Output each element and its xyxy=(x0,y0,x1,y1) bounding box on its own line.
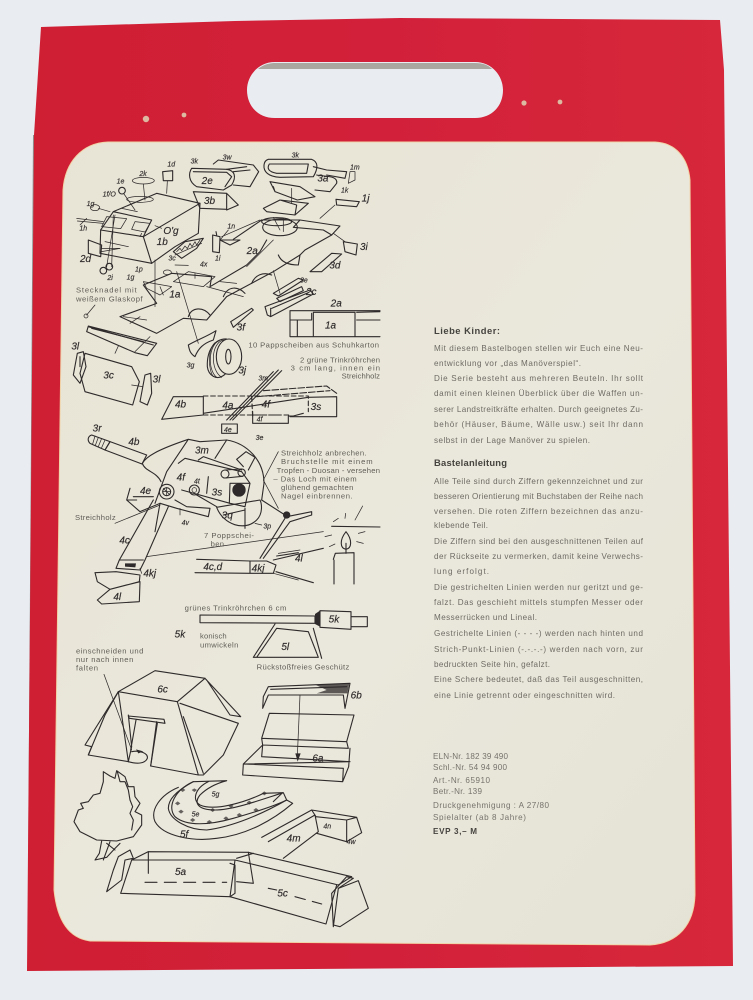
print and article details: Spielalter (ab 8 Jahre) xyxy=(433,813,526,822)
left trail 4c 4kj 4l xyxy=(95,500,168,604)
recoilless gun 5k 5l: umwickeln xyxy=(200,641,238,650)
chassis 2a with wheel arches: 4x xyxy=(200,262,208,269)
recoilless gun 5k 5l: 5k xyxy=(175,629,186,640)
text block: Liebe Kinder xyxy=(434,325,644,445)
print and article details: Betr.-Nr. 139 xyxy=(433,787,482,796)
chassis 2a with wheel arches xyxy=(120,220,340,333)
print and article details: Druckgenehmigung : A 27/80 xyxy=(433,801,549,810)
bumper and front 3c 3l xyxy=(71,317,161,405)
toothed insert and part 1i: 1n xyxy=(227,223,235,230)
small parts left: 1g xyxy=(87,201,95,208)
bunker 6a 6b: 6b xyxy=(351,690,362,701)
gun barrel and muzzle 4b 3r xyxy=(88,424,147,464)
fold plan 2a 1a: 1a xyxy=(325,320,337,331)
upper right parts: 3k xyxy=(292,152,300,159)
wheel sectors 3q 4v: Streichholz xyxy=(75,513,116,522)
chassis 2a with wheel arches: 3c xyxy=(168,256,176,263)
fenders and tracks 3k 3w 2e 3b: 3k xyxy=(191,158,199,165)
toothed insert and part 1i xyxy=(173,220,260,263)
wheel 3j and 3g xyxy=(177,272,247,377)
upper right parts: 1m xyxy=(350,164,360,171)
instruction paragraphs: Gestrichelte Linien (- - - -) werden nach hinten und xyxy=(434,629,643,638)
small parts left: 2k xyxy=(138,171,147,178)
drinking-straw note: Streichholz xyxy=(342,372,380,381)
wheel sectors 3q 4v: 4e xyxy=(140,486,152,497)
left trail 4c 4kj 4l: 4l xyxy=(113,592,122,603)
intro paragraph: Die Serie besteht aus mehreren Beuteln. Ihr sollt xyxy=(434,374,644,383)
earth walls 5f 5e 5g: 5e xyxy=(192,812,200,819)
instruction paragraphs: besseren Orientierung mit Buchstaben der Reihe nach xyxy=(434,492,643,501)
fenders and tracks 3k 3w 2e 3b: 3w xyxy=(223,154,233,161)
wheel 3j and 3g: 3j xyxy=(238,365,247,376)
pin label: weißem Glaskopf xyxy=(75,294,144,303)
bumper and front 3c 3l: 3l xyxy=(153,375,161,386)
print and article details: Schl.-Nr. 54 94 900 xyxy=(433,763,507,772)
right trail detail with candle and nail xyxy=(147,500,380,584)
heading: Bastelanleitung: Bastelanleitung xyxy=(434,457,507,468)
strip lower end 4e 4f: 4f xyxy=(257,416,264,423)
intro paragraph: serer Landstreitkräfte erhalten. Durch geeignetes Zu- xyxy=(434,405,643,414)
intro paragraph: selbst in der Lage Manöver zu spielen. xyxy=(434,436,590,445)
disc note: ben xyxy=(211,540,224,549)
intro paragraph: behör (Häuser, Bäume, Wälle usw.) seit Ihr dann xyxy=(434,420,643,429)
small parts left: 1d xyxy=(167,162,176,169)
match instructions: Streichholz anbrechen. xyxy=(281,449,367,458)
tent bunker 6c: nur nach innen xyxy=(76,655,133,664)
upper right parts: 1j xyxy=(362,194,370,205)
match instructions: Tropfen - Duosan - versehen xyxy=(277,466,380,475)
instruction paragraphs: Messerrücken und Lineal. xyxy=(434,613,537,622)
wheel sectors 3q 4v xyxy=(75,484,271,530)
pin label xyxy=(75,286,144,318)
match instructions: Nagel einbrennen. xyxy=(281,492,353,501)
gun barrel and muzzle 4b 3r: 3r xyxy=(93,424,102,435)
trench 4m 4n 4w: 4w xyxy=(347,839,357,846)
instruction paragraphs: der Rückseite zu vermerken, damit keine Verwechs- xyxy=(434,552,643,561)
instruction paragraphs: bedruckten Seite hin, gefalzt. xyxy=(434,660,550,669)
strips 3d 3e 2c 3f: 3d xyxy=(329,260,341,271)
print and article details: EVP 3,– M xyxy=(433,827,477,836)
match instructions: glühend gemachten xyxy=(281,483,353,492)
left trail 4c 4kj 4l: 4kj xyxy=(143,569,157,580)
instruction paragraphs: klebende Teil. xyxy=(434,521,488,530)
strips 3d 3e 2c 3f: 3f xyxy=(237,323,246,334)
strips 3d 3e 2c 3f: 2c xyxy=(305,287,317,298)
small parts left: 1e xyxy=(117,178,125,185)
right trail detail with candle and nail: 4kj xyxy=(252,564,265,575)
strip lower end 4e 4f xyxy=(222,412,303,434)
disc note xyxy=(204,531,254,549)
grey card edge behind cover xyxy=(28,135,36,880)
earth walls 5f 5e 5g: 5g xyxy=(212,792,220,799)
print and article details: Art.-Nr. 65910 xyxy=(433,776,490,785)
bumper and front 3c 3l: 3l xyxy=(71,341,80,352)
small parts left xyxy=(77,162,176,282)
small parts left: 1h xyxy=(79,226,87,233)
instruction paragraphs: Die gestrichelten Linien werden nur geritzt und ge- xyxy=(434,583,643,592)
gun shield 3m and mount: 3m xyxy=(195,445,209,456)
match instructions: – Das Loch mit einem xyxy=(273,474,357,483)
fenders and tracks 3k 3w 2e 3b xyxy=(190,154,259,210)
intro paragraph: damit einen kleinen Überblick über die Waffen un- xyxy=(434,389,643,398)
drawing: exploded vehicle assembly xyxy=(71,152,380,420)
instruction paragraphs: Strich-Punkt-Linien (-.-.-.-) werden nach vorn, zur xyxy=(434,645,643,654)
bunker 6a 6b: 6a xyxy=(312,754,324,765)
pin label: Stecknadel mit xyxy=(76,286,138,295)
long trench 5a 5c: 5c xyxy=(277,889,288,900)
fold plan 2a 1a: 2a xyxy=(330,299,342,310)
upper right parts: 3a xyxy=(317,174,329,185)
drinking-straw note: 2 grüne Trinkröhrchen xyxy=(300,356,380,365)
recoilless gun 5k 5l: grünes Trinkröhrchen 6 cm xyxy=(185,603,286,612)
fenders and tracks 3k 3w 2e 3b: 3b xyxy=(204,196,216,207)
fold plan 2a 1a xyxy=(290,299,380,337)
earth walls 5f 5e 5g: 5f xyxy=(180,829,190,840)
fenders and tracks 3k 3w 2e 3b: 2e xyxy=(201,176,213,187)
upper right parts: 1k xyxy=(341,188,349,195)
cream instruction panel xyxy=(54,142,695,945)
wheel sectors 3q 4v: 3p xyxy=(263,523,271,530)
intro paragraph: Mit diesem Bastelbogen stellen wir Euch eine Neu- xyxy=(434,344,643,353)
drinking-straw note xyxy=(291,356,380,381)
barrel strip 4b 4a 4f 3s: 4f xyxy=(262,400,271,411)
print and article details: ELN-Nr. 182 39 490 xyxy=(433,752,508,761)
wheel sectors 3q 4v: 3q xyxy=(222,510,233,521)
upper right parts: 3i xyxy=(360,242,369,253)
tent bunker 6c: einschneiden und xyxy=(76,646,143,655)
small parts left: 1g xyxy=(127,274,135,281)
intro paragraph xyxy=(434,344,644,445)
barrel strip 4b 4a 4f 3s: 3m xyxy=(258,376,268,383)
tent bunker 6c: 6c xyxy=(157,685,168,696)
long trench 5a 5c: 5a xyxy=(175,867,187,878)
barrel strip 4b 4a 4f 3s xyxy=(162,370,337,420)
trench 4m 4n 4w xyxy=(262,810,362,858)
bunker 6a 6b xyxy=(243,683,362,782)
intro paragraph: entwicklung vor „das Manöverspiel“. xyxy=(434,359,581,368)
match instructions: Bruchstelle mit einem xyxy=(281,457,373,466)
tent bunker 6c xyxy=(76,646,241,775)
right trail detail with candle and nail: 4l xyxy=(295,554,304,565)
chassis 2a with wheel arches: 2a xyxy=(246,246,258,257)
long trench 5a 5c xyxy=(107,850,368,927)
gun shield 3m and mount xyxy=(142,435,264,507)
recoilless gun 5k 5l xyxy=(175,603,367,672)
instruction paragraphs: versehen. Die roten Ziffern bezeichnen das anzu- xyxy=(434,507,643,516)
recoilless gun 5k 5l: Rückstoßfreies Geschütz xyxy=(257,663,350,672)
vehicle cab 1b: 1b xyxy=(157,237,168,248)
trench 4m 4n 4w: 4n xyxy=(323,823,331,830)
barrel strip 4b 4a 4f 3s: 4b xyxy=(175,399,187,410)
small parts left: 1f/O xyxy=(103,192,116,199)
match instructions xyxy=(263,449,380,508)
tent bunker 6c: falten xyxy=(76,664,98,673)
instruction paragraphs: Alle Teile sind durch Ziffern gekennzeichnet und zur xyxy=(434,477,643,486)
wheel sectors 3q 4v: 4v xyxy=(182,520,190,527)
instruction paragraphs xyxy=(434,477,644,700)
instruction paragraphs: eine Linie getrennt oder eingeschnitten wird. xyxy=(434,691,615,700)
instruction paragraphs: lung erfolgt. xyxy=(434,567,489,576)
bumper and front 3c 3l: 3c xyxy=(103,370,114,381)
instruction paragraphs: Eine Schere bedeutet, daß das Teil ausgeschnitten, xyxy=(434,675,643,684)
recoilless gun 5k 5l: 5l xyxy=(281,642,290,653)
strip lower end 4e 4f: 4e xyxy=(224,427,232,434)
gun shield 3m and mount: 3e xyxy=(256,435,264,442)
barrel strip 4b 4a 4f 3s: 4a xyxy=(222,400,234,411)
earth walls 5f 5e 5g xyxy=(154,781,293,840)
wheel 3j and 3g: 3g xyxy=(187,362,195,369)
text block: Bastelanleitung xyxy=(434,457,644,700)
gun barrel and muzzle 4b 3r: 4b xyxy=(128,437,140,448)
vehicle cab 1b: O'g xyxy=(163,226,179,237)
heading: Liebe Kinder: Liebe Kinder: xyxy=(434,325,500,336)
trench 4m 4n 4w: 4m xyxy=(287,834,301,845)
tree xyxy=(74,771,142,860)
drinking-straw note: 3 cm lang, innen ein xyxy=(291,364,380,373)
gun shield 3m and mount: 4f xyxy=(177,473,186,484)
chassis 2a with wheel arches: 1a xyxy=(169,289,181,300)
barrel strip 4b 4a 4f 3s: 3s xyxy=(311,402,321,413)
small parts left: 2i xyxy=(106,275,113,282)
small parts left: 2d xyxy=(79,254,92,265)
drawing: anti-tank gun assembly xyxy=(75,412,380,672)
strips 3d 3e 2c 3f xyxy=(231,253,342,334)
disc note: 7 Poppschei- xyxy=(204,531,254,540)
hole inner bevel xyxy=(258,63,492,69)
gun shield 3m and mount: 3s xyxy=(212,487,222,498)
print and article details xyxy=(433,752,549,836)
recoilless gun 5k 5l: konisch xyxy=(200,632,227,641)
right trail detail with candle and nail: 4c,d xyxy=(203,562,223,573)
instruction paragraphs: Die Ziffern sind bei den ausgeschnittenen Teilen auf xyxy=(434,537,644,546)
toothed insert and part 1i: 1i xyxy=(215,256,221,263)
strips 3d 3e 2c 3f: 3e xyxy=(300,278,308,285)
card-disc note: 10 Pappscheiben aus Schuhkarton xyxy=(248,341,379,350)
upper right parts xyxy=(262,152,370,255)
recoilless gun 5k 5l: 5k xyxy=(329,615,340,626)
gun shield 3m and mount: 4t xyxy=(194,478,201,485)
small parts left: 1p xyxy=(135,267,143,274)
vehicle cab 1b xyxy=(100,193,200,267)
drawing: field fortifications xyxy=(74,646,368,927)
instruction paragraphs: falzt. Das geschieht mittels stumpfen Messer oder xyxy=(434,598,643,607)
left trail 4c 4kj 4l: 4c xyxy=(119,535,130,546)
